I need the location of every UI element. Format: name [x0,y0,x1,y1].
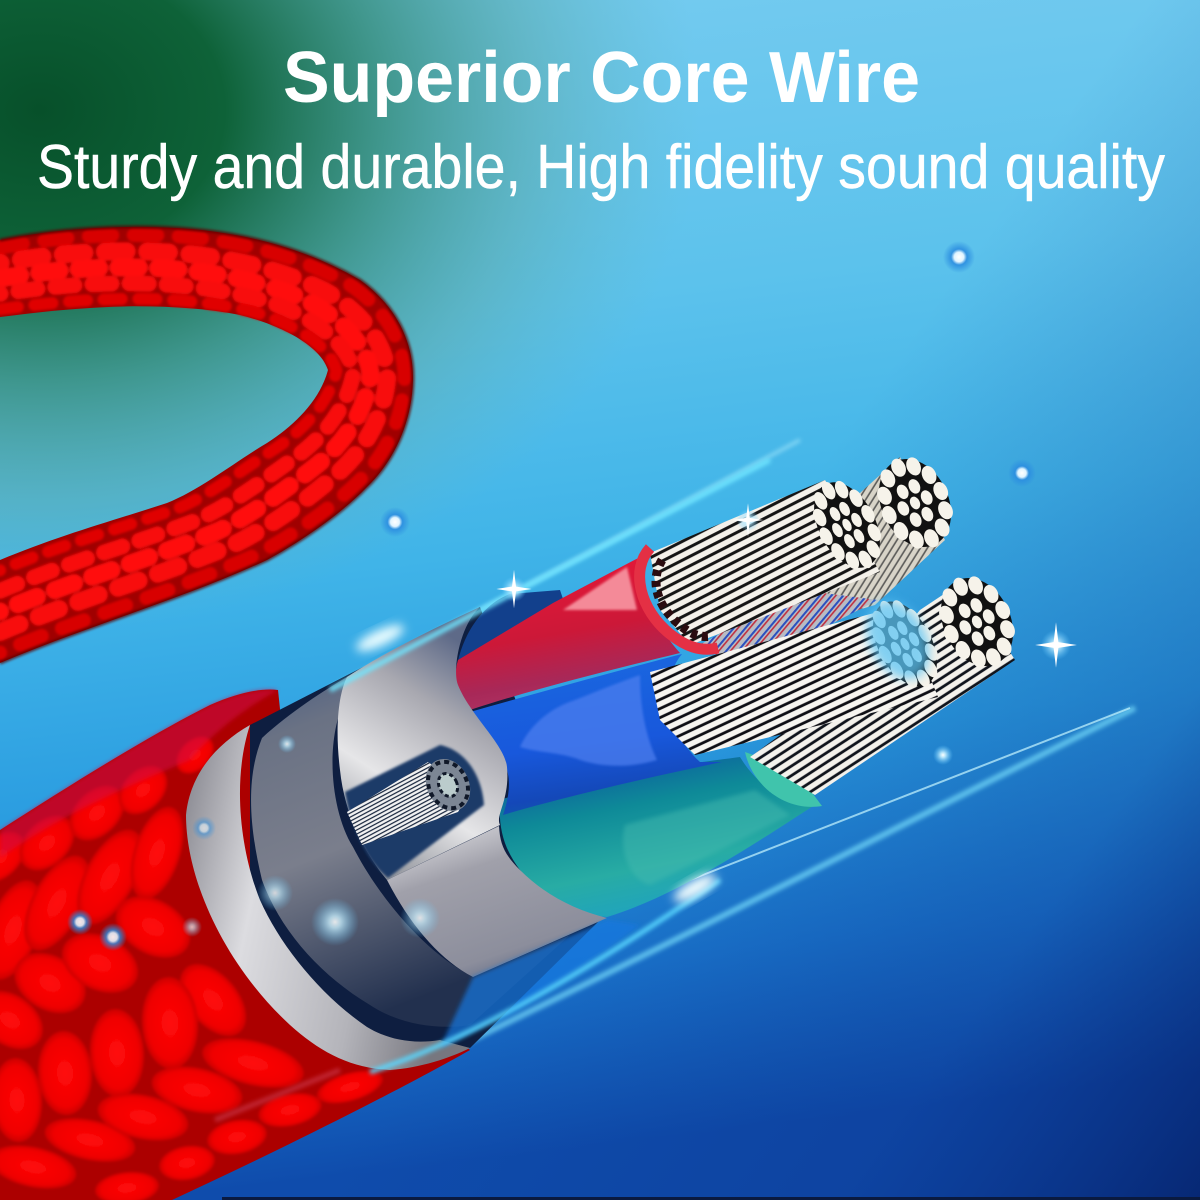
title: Superior Core Wire [283,38,920,118]
small wire bundle [347,752,478,845]
glass tube highlights [330,460,770,1072]
recess around small wire [345,745,484,878]
loop of red braided cable [0,227,413,663]
wire bundle: back bottom [750,563,1029,795]
wire bundle: front top [650,468,896,655]
teal insulated conductor [500,757,818,917]
lower metal sleeve [387,826,607,977]
blue insulated conductor [470,654,722,815]
wire bundle: back top [720,444,967,650]
red insulated conductor [456,556,680,710]
wire bundle: front bottom [650,588,952,755]
sparkles [67,241,1077,951]
teal sleeve end [745,752,822,807]
silver outer ring [186,725,470,1070]
dark base under metal rings [250,607,600,1048]
upper light metal sleeve [338,607,507,880]
dark grey ring [251,610,570,1027]
dark inner cavity [455,590,570,700]
red sleeve end with teeth [640,548,718,649]
conductors group [455,444,1029,917]
background light streaks [330,440,1135,1060]
main red braided cable body [0,690,470,1200]
